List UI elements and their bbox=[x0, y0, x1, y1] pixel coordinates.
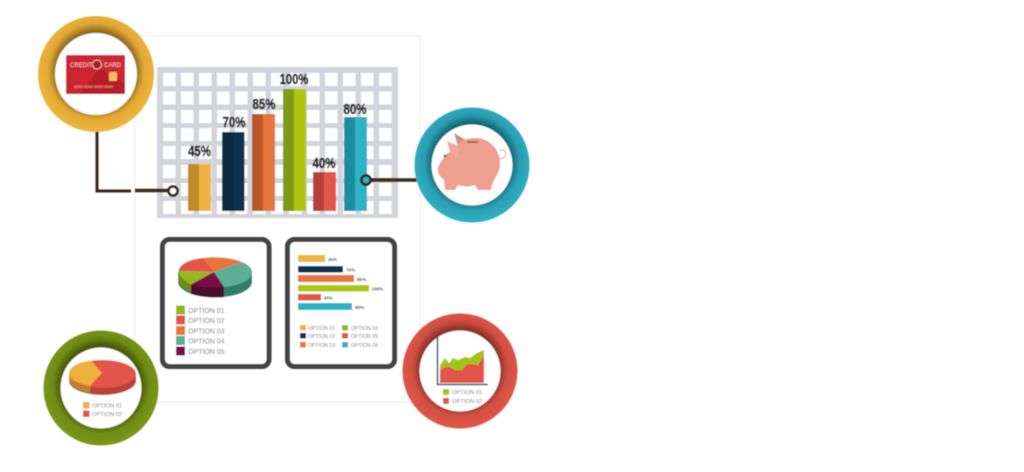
horizontal bar chart: 100% bbox=[372, 286, 383, 292]
bar: 70%: 70% bbox=[222, 114, 246, 131]
bar: 100% bbox=[280, 71, 308, 211]
arrow: credit card connector bbox=[97, 131, 178, 196]
bar: 45%: 45% bbox=[188, 143, 211, 160]
bar: 40%: 40% bbox=[312, 155, 336, 172]
small pie legend bbox=[83, 402, 122, 418]
bars legend: OPTION 01 bbox=[308, 326, 335, 332]
arrow: piggy bank connector bbox=[362, 176, 417, 184]
piggy bank bbox=[438, 133, 506, 190]
bar: 80% bbox=[344, 101, 367, 211]
pie legend: OPTION 04 bbox=[188, 338, 225, 346]
bars legend: OPTION 03 bbox=[308, 343, 335, 349]
panel: horizontal bars card bbox=[288, 240, 394, 366]
pie legend bbox=[176, 306, 225, 356]
credit card: 0000 0000 0000 0000 bbox=[74, 84, 114, 89]
small 3D pie bbox=[69, 360, 136, 395]
bars legend: OPTION 06 bbox=[351, 343, 378, 349]
area chart legend: OPTION 02 bbox=[452, 399, 482, 405]
credit card: CREDIT bbox=[70, 63, 93, 69]
panel: pie chart card bbox=[162, 240, 269, 366]
horizontal bar chart: 70% bbox=[346, 268, 355, 272]
bars legend: OPTION 02 bbox=[308, 334, 335, 340]
pie legend: OPTION 05 bbox=[188, 349, 225, 356]
credit card: CARD bbox=[104, 63, 122, 69]
bars legend bbox=[300, 325, 378, 349]
icon: piggy bank badge bbox=[423, 116, 521, 214]
pie legend: OPTION 01 bbox=[188, 308, 225, 315]
icon: area chart badge bbox=[411, 322, 509, 420]
bar: 80%: 80% bbox=[344, 101, 366, 118]
credit card bbox=[66, 55, 125, 94]
area chart bbox=[438, 337, 488, 384]
horizontal bar chart bbox=[298, 255, 383, 310]
panel: report page bbox=[135, 36, 420, 402]
bar: 45% bbox=[188, 143, 211, 211]
bar: 85%: 85% bbox=[252, 96, 276, 113]
bars legend: OPTION 05 bbox=[351, 334, 378, 340]
icon: credit card badge bbox=[46, 24, 146, 124]
bar: 100%: 100% bbox=[280, 71, 308, 88]
horizontal bar chart: 85% bbox=[357, 277, 366, 282]
bar: 40% bbox=[312, 155, 336, 211]
icon: pie chart badge bbox=[52, 339, 150, 437]
small pie legend: OPTION 01 bbox=[92, 404, 122, 410]
pie legend: OPTION 02 bbox=[188, 318, 225, 325]
horizontal bar chart: 45% bbox=[328, 257, 337, 262]
horizontal bar chart: 80% bbox=[355, 305, 364, 310]
area chart legend bbox=[443, 389, 482, 405]
area chart legend: OPTION 01 bbox=[452, 390, 482, 396]
chart grid bbox=[157, 67, 398, 218]
bars legend: OPTION 04 bbox=[351, 326, 378, 332]
horizontal bar chart: 40% bbox=[324, 296, 333, 300]
bar: 70% bbox=[222, 114, 246, 211]
bar: 85% bbox=[252, 96, 276, 211]
pie legend: OPTION 03 bbox=[188, 328, 225, 336]
3D pie chart bbox=[178, 257, 252, 298]
bar chart bbox=[157, 67, 398, 218]
small pie legend: OPTION 02 bbox=[92, 412, 122, 418]
